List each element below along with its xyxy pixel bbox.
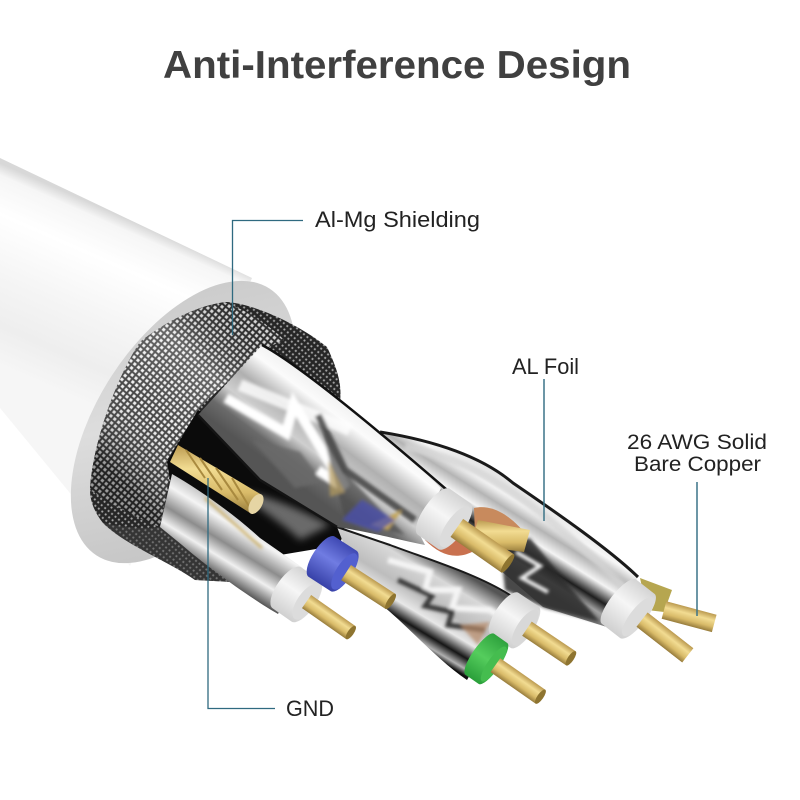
label: AL Foil: AL Foil [512,354,579,379]
white outer jacket [0,158,252,566]
stranded copper drain conductor [170,445,267,517]
rear wire with AL foil [380,432,638,628]
braided Al-Mg mesh [90,302,340,582]
label: GND [208,478,334,721]
green insulated wire and pin [460,630,557,719]
label: Al-Mg Shielding [232,207,480,335]
dark cable interior [167,410,345,560]
bottom left shielded wire [160,474,303,614]
white collar lower right and pin [483,588,587,681]
jacket end ring [25,242,341,602]
rear wire white collar and pins [595,574,717,677]
title: Anti-Interference Design [163,44,631,87]
label: Al-Mg Shielding: Al-Mg Shielding [315,207,480,232]
label: GND: GND [286,696,334,721]
main upper shielded wire [198,345,447,545]
label: 26 AWG Solid Bare Copper: 26 AWG Solid [627,431,767,454]
white collar upper with orange insulator and pins [410,483,530,588]
lower centre wire [337,527,513,680]
bottom left white collar and pin [264,562,368,655]
label: 26 AWG Solid Bare Copper [627,431,767,616]
label: 26 AWG Solid Bare Copper: Bare Copper [634,453,761,476]
cable illustration [0,158,717,719]
blue insulated wire and pin [301,532,406,623]
